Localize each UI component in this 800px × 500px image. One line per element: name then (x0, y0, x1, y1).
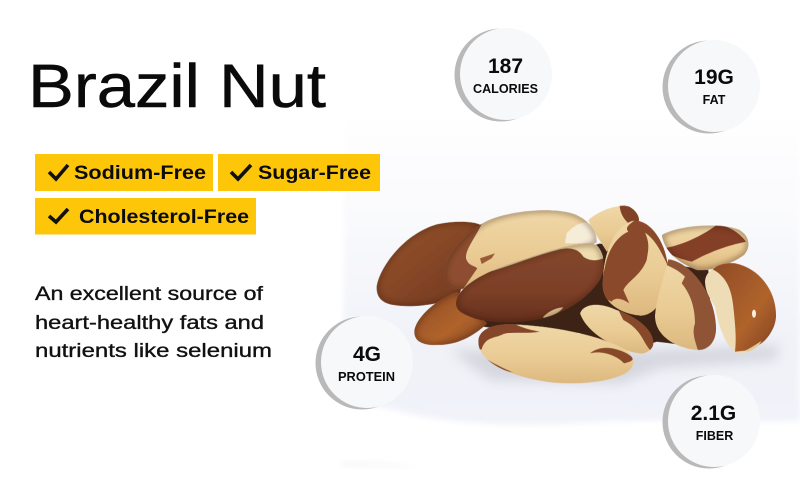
stat bubble: fiber (662, 375, 760, 468)
badge: cholesterol-free: Cholesterol-Free (79, 207, 249, 228)
badge: sugar-free: Sugar-Free (258, 163, 371, 184)
icon: check (49, 209, 68, 222)
nut: right top (662, 225, 748, 270)
nut: right middle (655, 258, 718, 352)
nut: large top (444, 210, 597, 290)
nut: upright (600, 219, 670, 316)
nut: far right (705, 261, 778, 353)
description text: nutrients like selenium (35, 341, 272, 362)
stat bubble: calories: CALORIES (473, 82, 538, 96)
description text (35, 284, 272, 362)
nut shadow (450, 345, 780, 384)
icon: check (49, 165, 68, 179)
nut: lower left (414, 292, 487, 345)
stat bubble: fat: FAT (703, 93, 726, 107)
icon: check (231, 165, 251, 179)
photo: pile of brazil nuts (377, 203, 780, 384)
stat bubble: calories (454, 28, 552, 122)
nut: lower middle (580, 305, 657, 354)
stat bubble: calories: 187 (488, 55, 523, 78)
stat bubble: protein: 4G (353, 343, 381, 366)
dark fill between nuts (470, 243, 712, 348)
stat bubble: fiber: 2.1G (691, 402, 736, 425)
title: Brazil Nut (28, 52, 326, 120)
badge: cholesterol-free (35, 198, 256, 234)
nut: central brown (456, 240, 604, 322)
nut: left brown (377, 222, 481, 306)
nut: back top (588, 206, 639, 252)
badge: sodium-free (35, 154, 213, 191)
nut: front cream (475, 322, 633, 383)
stat bubble: fat (662, 40, 760, 134)
badge: sodium-free: Sodium-Free (74, 163, 206, 184)
description text: heart-healthy fats and (35, 313, 264, 334)
stat bubble: fiber: FIBER (696, 429, 733, 443)
badge: sugar-free (218, 154, 380, 191)
stat bubble: fat: 19G (694, 66, 734, 89)
stat bubble: protein: PROTEIN (338, 370, 395, 384)
stat bubble: protein (316, 316, 413, 410)
description text: An excellent source of (35, 284, 264, 305)
photo background (342, 100, 800, 468)
